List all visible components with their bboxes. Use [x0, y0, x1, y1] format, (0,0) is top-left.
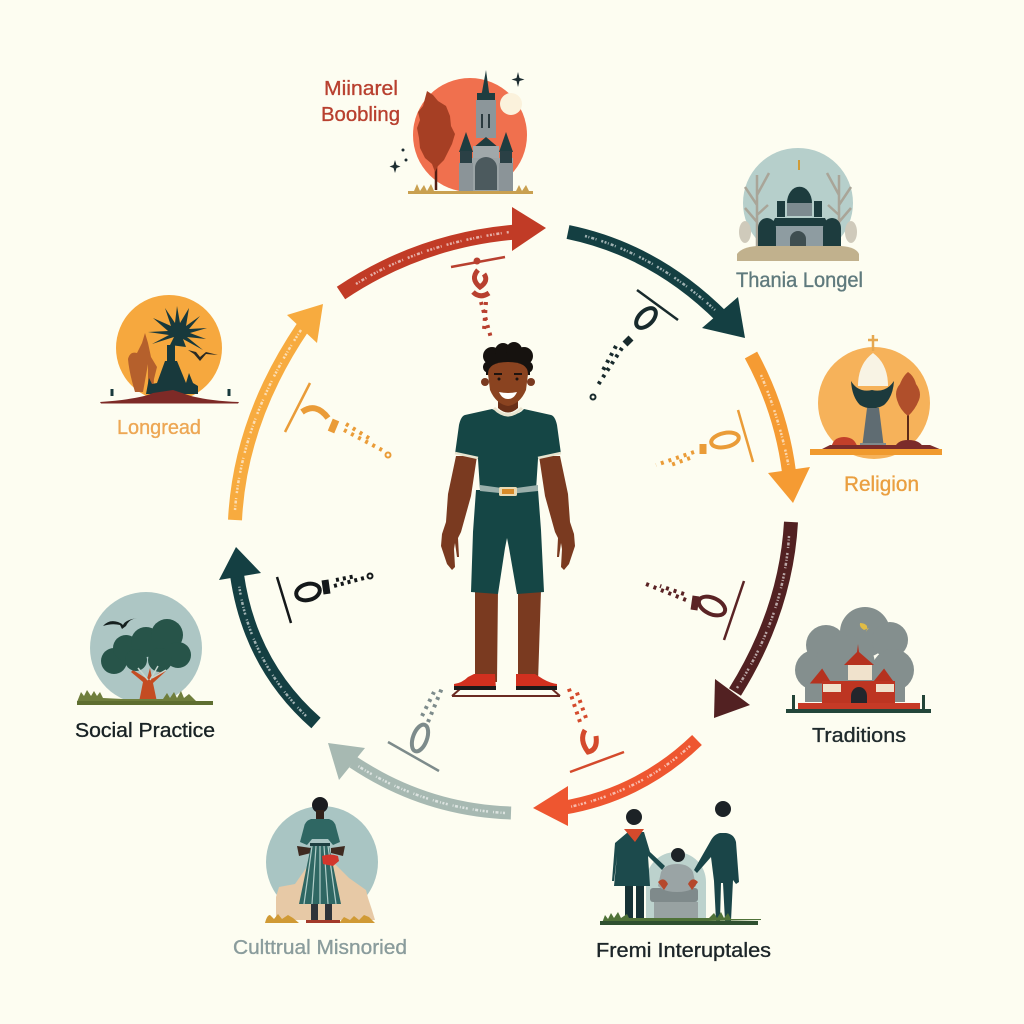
shoes — [454, 674, 557, 690]
shirt — [455, 409, 561, 490]
glyph: orange left — [285, 383, 390, 458]
arrow: dark teal left — [219, 547, 316, 723]
panel: Thania Longel — [736, 148, 863, 292]
panel: Traditions — [786, 607, 931, 747]
icon: tree with bird — [77, 592, 213, 705]
panel: Longread — [100, 295, 239, 439]
label: Fremi Interuptales: Fremi Interuptales — [596, 940, 771, 962]
central person — [441, 342, 575, 696]
panel: Fremi Interuptales — [596, 801, 771, 962]
label: Miinarel Boobling: Boobling — [321, 104, 400, 126]
panel: Miinarel Boobling — [321, 70, 533, 194]
icon: family around seated figure — [600, 801, 761, 925]
panel: Social Practice — [75, 592, 215, 742]
glyph: maroon right — [646, 581, 744, 640]
inner connector glyphs — [277, 257, 753, 772]
arrow: dark teal upper right — [568, 232, 745, 338]
platform — [452, 689, 560, 696]
icon: woman in striped dress — [265, 797, 378, 923]
label: Traditions: Traditions — [812, 725, 906, 747]
icon: palm monument on orange sun — [100, 295, 239, 404]
glyph: grey lower left — [388, 688, 442, 771]
arrow: grey lower — [328, 743, 511, 813]
arrow: orange left — [235, 304, 323, 520]
shorts — [471, 490, 544, 594]
icon: red palace before grey cloud — [786, 607, 931, 713]
label: Longread: Longread — [117, 417, 201, 439]
glyph: dark teal upper right — [590, 290, 678, 400]
icon: dome monument with autumn tree — [810, 335, 942, 459]
head — [481, 342, 535, 406]
glyph: black left — [277, 574, 372, 623]
label: Thania Longel: Thania Longel — [736, 269, 863, 292]
arrow: maroon right — [714, 522, 791, 718]
arms — [441, 456, 575, 570]
panel: Cultural Misnoried — [233, 797, 407, 959]
glyph: orange right — [656, 410, 753, 466]
cycle arrows — [219, 207, 810, 826]
arrow: orange right — [751, 355, 810, 503]
glyph: red top — [451, 257, 505, 338]
arrow: red-orange lower right — [533, 740, 697, 826]
label: Social Practice: Social Practice — [75, 720, 215, 742]
belt — [480, 485, 538, 496]
panel: Religion — [810, 335, 942, 496]
arrow: red — [341, 207, 546, 293]
label: Cultural Misnoried: Culttrual Misnoried — [233, 937, 407, 959]
legs — [475, 590, 541, 682]
label: Miinarel Boobling — [321, 78, 400, 126]
label: Religion: Religion — [844, 473, 919, 496]
label: Miinarel Boobling: Miinarel — [324, 78, 398, 100]
icon: castle with tree on orange sun — [390, 70, 533, 194]
glyph: red lower right — [568, 686, 624, 772]
neck — [498, 392, 518, 412]
icon: domed cathedral with bare trees — [737, 148, 859, 261]
